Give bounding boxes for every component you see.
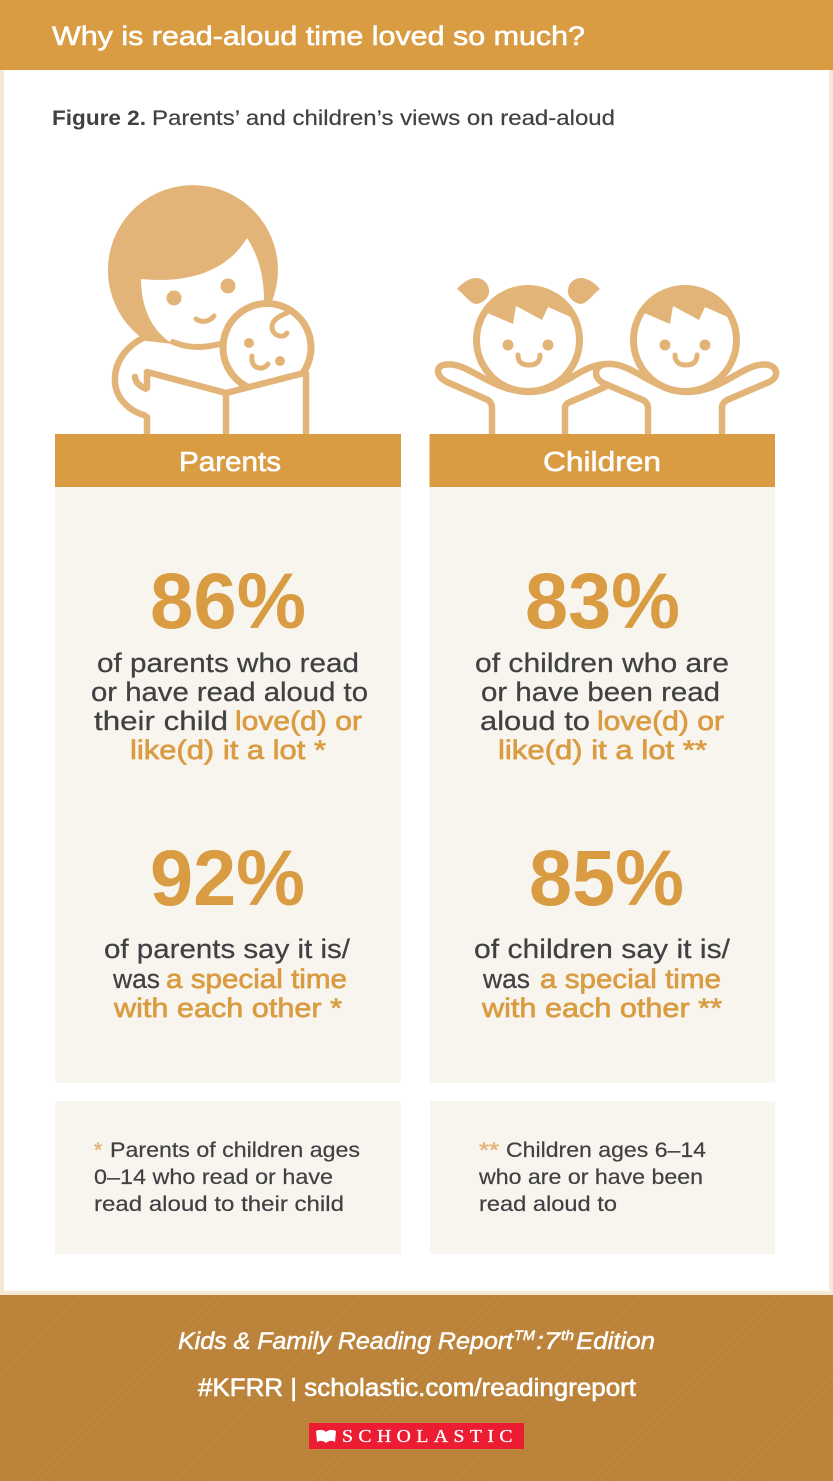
report title: Edition xyxy=(576,1328,655,1355)
footnote: parents: Parents of children ages xyxy=(110,1139,360,1162)
stat: 86% of parents love read-aloud: of parents who read xyxy=(97,648,359,678)
stat: 92% of parents special time: was xyxy=(112,964,160,994)
hashtag and URL: #KFRR | scholastic.com/readingreport xyxy=(198,1374,636,1402)
stat: 85% of children special time: of children say it is/ xyxy=(474,934,731,964)
stat: 83% of children love read-aloud: like(d) it a lot ** xyxy=(498,735,708,765)
footnote: children xyxy=(430,1101,775,1254)
figure caption: Parents’ and children’s views on read-aloud xyxy=(152,107,615,130)
footnote: parents: read aloud to their child xyxy=(94,1193,344,1216)
footnote: children: who are or have been xyxy=(478,1166,703,1189)
stat: 85% of children special time: with each other ** xyxy=(481,993,723,1023)
stat: 83% of children love read-aloud xyxy=(475,556,729,765)
stat: 92% of parents special time: 92% xyxy=(150,833,305,922)
stat: 85% of children special time: was xyxy=(482,964,530,994)
parents heading bar xyxy=(55,434,401,487)
stat: 92% of parents special time xyxy=(104,833,351,1023)
stat: 86% of parents love read-aloud xyxy=(91,556,368,765)
stat: 83% of children love read-aloud: 83% xyxy=(525,556,680,645)
footer band xyxy=(0,1295,833,1481)
stat: 83% of children love read-aloud: aloud to xyxy=(480,706,590,736)
stat: 86% of parents love read-aloud: or have read aloud to xyxy=(91,677,368,707)
footnote: parents: * xyxy=(94,1139,102,1162)
report title xyxy=(178,1327,655,1355)
title: Why is read-aloud time loved so much? xyxy=(52,21,585,51)
logo: Scholastic: SCHOLASTIC xyxy=(342,1426,518,1446)
logo: Scholastic xyxy=(309,1423,524,1449)
footnote: children: ** xyxy=(479,1139,499,1162)
stat: 86% of parents love read-aloud: love(d) or xyxy=(235,706,362,736)
stat: 83% of children love read-aloud: or have been read xyxy=(481,677,720,707)
children heading bar xyxy=(430,434,775,487)
icon: parent reading to baby xyxy=(108,185,311,434)
stat: 85% of children special time: 85% xyxy=(529,833,684,922)
panel: children xyxy=(430,434,775,1083)
stat: 86% of parents love read-aloud: like(d) it a lot * xyxy=(130,735,327,765)
report title: TM xyxy=(514,1327,535,1343)
stat: 92% of parents special time: a special time xyxy=(166,964,347,994)
parents heading bar: Parents xyxy=(179,446,281,477)
footnote: children: read aloud to xyxy=(479,1193,617,1216)
report title: :7 xyxy=(536,1328,562,1355)
stat: 86% of parents love read-aloud: their child xyxy=(94,706,228,736)
stat: 83% of children love read-aloud: of children who are xyxy=(475,648,729,678)
stat: 92% of parents special time: of parents say it is/ xyxy=(104,934,351,964)
report title: Kids & Family Reading Report xyxy=(178,1328,514,1355)
panel: parents xyxy=(55,434,401,1083)
icon: two children with raised arms xyxy=(438,278,776,434)
stat: 85% of children special time xyxy=(474,833,731,1023)
header band xyxy=(0,0,833,70)
figure caption: Figure 2. xyxy=(52,107,146,130)
stat: 85% of children special time: a special time xyxy=(540,964,721,994)
stat: 92% of parents special time: with each other * xyxy=(113,993,343,1023)
report title: th xyxy=(561,1327,574,1343)
children heading bar: Children xyxy=(543,446,661,477)
stat: 83% of children love read-aloud: love(d) or xyxy=(597,706,724,736)
stat: 86% of parents love read-aloud: 86% xyxy=(150,556,306,645)
footnote: children: Children ages 6–14 xyxy=(506,1139,706,1162)
footnote: parents xyxy=(55,1101,401,1254)
footnote: parents: 0–14 who read or have xyxy=(94,1166,333,1189)
